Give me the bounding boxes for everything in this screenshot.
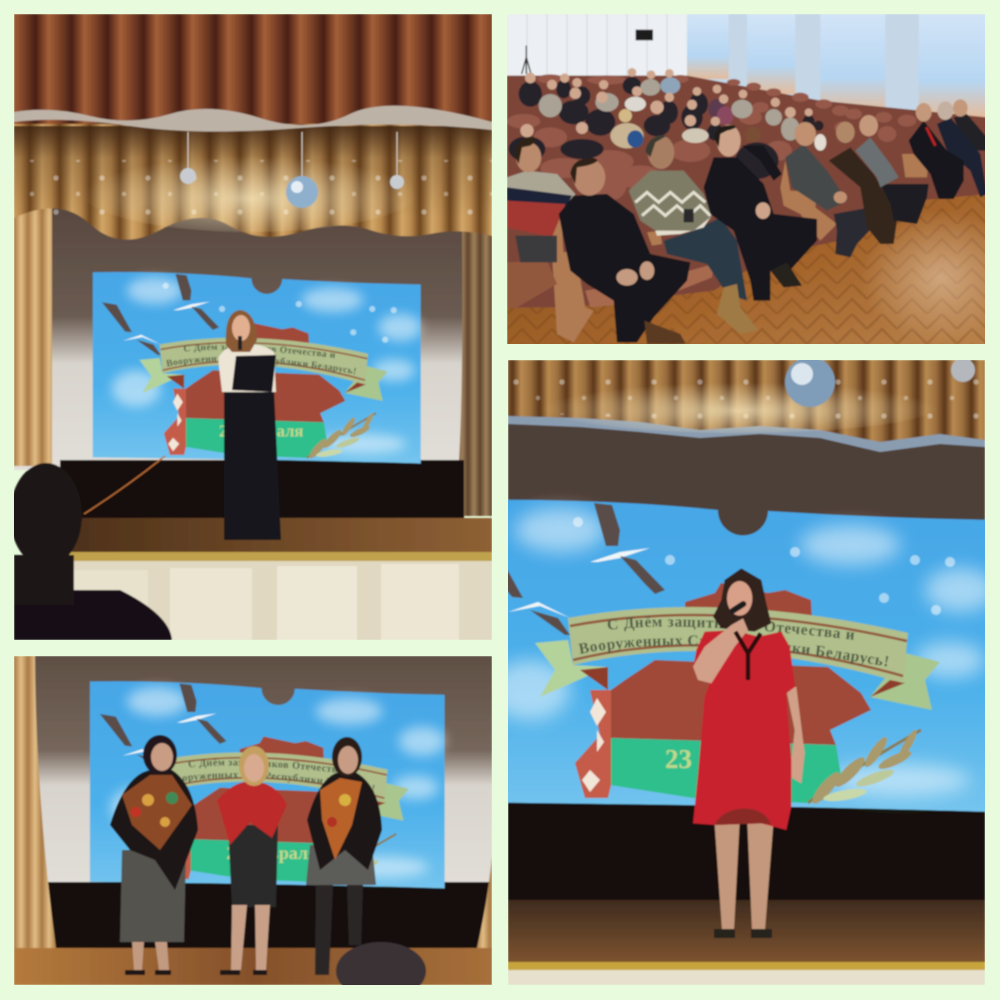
- beaded necklace: [735, 632, 761, 680]
- date: 23 февраля: [665, 744, 803, 774]
- microphone: [733, 604, 743, 611]
- stage floor: [14, 948, 492, 985]
- front row: woman behind: [742, 146, 782, 181]
- stork upper: [177, 683, 226, 744]
- date: 23 февраля: [219, 421, 303, 440]
- wall behind stage: [14, 656, 492, 891]
- projected screen: [508, 496, 985, 814]
- stork lower: [102, 302, 161, 355]
- date: 23 февраля: [226, 843, 318, 863]
- front row: man in brown sweater: [829, 122, 900, 244]
- woman right in black shawl: [306, 737, 382, 975]
- panel: singer in red dress: [508, 360, 985, 985]
- stage black backdrop: [40, 882, 490, 952]
- right arm: [786, 687, 805, 783]
- side curtains: [14, 205, 492, 516]
- panel: audience in the hall: [507, 14, 1000, 347]
- stork upper: [590, 503, 665, 594]
- right group: men in dark suits: [909, 99, 987, 199]
- stork upper: [173, 274, 219, 330]
- parquet floor: [507, 194, 985, 344]
- gold stage edge: [60, 552, 492, 561]
- greeting text line two: Вооруженных Сил Республики Беларусь!: [182, 772, 375, 792]
- lower valance: [14, 106, 492, 240]
- woman left with microphone: [110, 735, 198, 975]
- projected screen: [88, 680, 452, 890]
- stork lower: [100, 714, 164, 771]
- stage front: [508, 970, 985, 985]
- ribbon tails: [139, 358, 388, 401]
- upper wall: [508, 410, 985, 550]
- front row: man in grey jacket: [785, 120, 870, 258]
- greeting text: С Днём защитников Отечества и: [183, 343, 336, 358]
- upper curtain: [14, 14, 492, 132]
- front row: man in striped sweater: [507, 137, 575, 262]
- stage black backdrop: [508, 800, 985, 902]
- seat rows: [507, 74, 987, 307]
- map of Belarus: [575, 583, 871, 803]
- screen sky: [93, 272, 421, 463]
- greeting text: С Днём защитников Отечества и: [607, 616, 855, 640]
- ribbon tails: [535, 640, 940, 710]
- greeting text line two: Вооруженных Сил Республики Беларусь!: [166, 356, 356, 375]
- dress underside: [715, 808, 771, 825]
- greeting ribbon: [568, 607, 908, 683]
- red dress: [693, 630, 795, 830]
- top valance curtain: [508, 360, 985, 452]
- panel: three women in floral shawls: [14, 656, 492, 985]
- front row: young man in black hoodie: [704, 125, 817, 301]
- ribbon tails: [140, 774, 409, 821]
- wall behind stage: [14, 208, 464, 472]
- front row: man in patterned sweater: [629, 136, 759, 334]
- front row: man in black jumper: [559, 158, 690, 344]
- presenter: [218, 310, 281, 540]
- stork lower: [474, 549, 570, 635]
- raised arm: [693, 618, 748, 683]
- side curtains: [14, 656, 492, 952]
- greeting ribbon: [160, 338, 368, 384]
- microphone cable: [84, 456, 165, 514]
- screen sky: [459, 500, 995, 812]
- singer: [693, 568, 805, 938]
- screen sky: [90, 681, 445, 888]
- spectator silhouette: [10, 463, 172, 640]
- hall wall and windows: [507, 14, 987, 121]
- stage front: [60, 561, 492, 640]
- back rows of spectators: [509, 68, 826, 179]
- legs and shoes: [714, 815, 774, 938]
- face: [727, 581, 752, 616]
- map of Belarus: [164, 323, 345, 458]
- panel: presenter with folder on stage: [14, 14, 492, 640]
- woman centre with red shawl: [217, 746, 287, 975]
- wheat branch: [307, 412, 376, 460]
- wheat branch: [808, 728, 921, 807]
- map of Belarus: [167, 737, 363, 882]
- front row: man in grey shirt: [855, 115, 929, 224]
- greeting text line two: Вооруженных Сил Республики Беларусь!: [578, 634, 889, 667]
- wheat branch: [321, 834, 396, 885]
- hanging disco balls: [180, 132, 404, 208]
- chairs and armrests: [507, 154, 929, 342]
- disco balls: [785, 357, 975, 407]
- gold stage edge: [508, 962, 985, 970]
- spectator head: [336, 942, 426, 1000]
- greeting ribbon: [162, 752, 388, 803]
- stage floor: [508, 900, 985, 964]
- stage black backdrop: [60, 460, 464, 522]
- projected screen: [92, 270, 426, 465]
- hair: [713, 568, 771, 632]
- stage floor: [60, 518, 492, 556]
- greeting text: С Днём защитников Отечества и: [188, 758, 338, 774]
